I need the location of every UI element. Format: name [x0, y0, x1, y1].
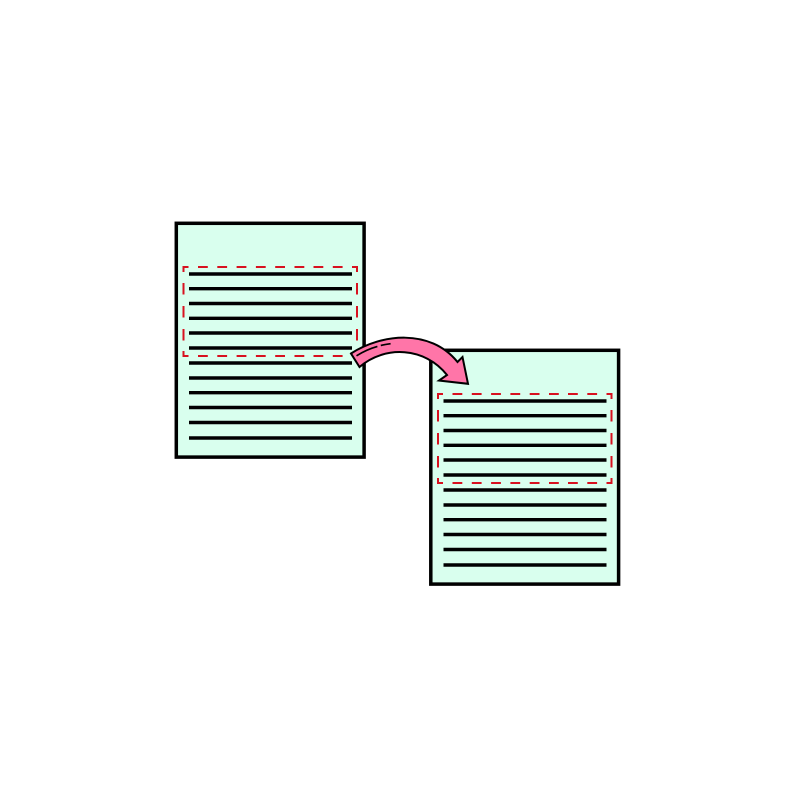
selection: dashed red box on source [184, 267, 357, 356]
selection: dashed red box on destination [438, 394, 612, 483]
text lines: source document [189, 274, 352, 438]
text lines: destination document [444, 401, 606, 565]
arrow highlight: dashed line on arrow [356, 344, 392, 356]
panel: destination document [431, 350, 619, 584]
panel: source document [176, 223, 364, 457]
arrow: curved pink arrow from source to destination [351, 338, 468, 384]
